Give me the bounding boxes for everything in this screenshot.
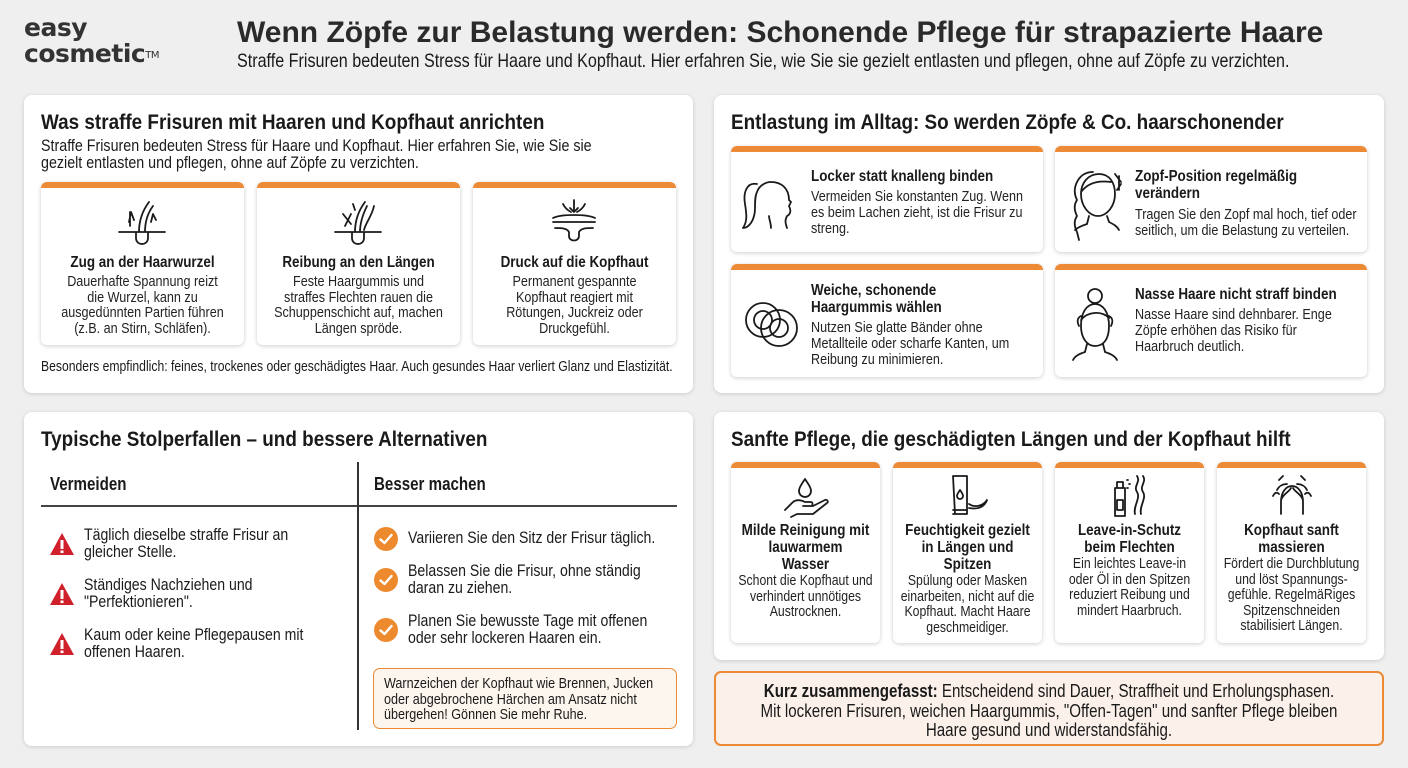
card: Reibung: Reibung an den Längen xyxy=(282,254,435,271)
card: Feuchtigkeit: Spülung oder Masken xyxy=(908,573,1027,589)
card: Locker: Vermeiden Sie konstanten Zug. Wenn xyxy=(811,188,1023,205)
title: Wenn Zöpfe zur Belastung werden: Schonende Pflege für strapazierte Haare xyxy=(237,16,1323,49)
card: Reinigung: lauwarmem xyxy=(769,539,842,556)
card: Leave-in: Ein leichtes Leave-in xyxy=(1073,556,1186,572)
icon: scrunchies xyxy=(745,302,798,347)
card: Feuchtigkeit: einarbeiten, nicht auf die xyxy=(901,588,1034,604)
logo: cosmeticTM xyxy=(24,39,159,68)
card: Zopf-Position: verändern xyxy=(1135,185,1200,202)
item: better 3: Planen Sie bewusste Tage mit offenen xyxy=(408,611,647,630)
panel: Stolperfallen xyxy=(24,412,693,746)
callout: warning signs: Warnzeichen der Kopfhaut wie Brennen, Jucken xyxy=(384,675,653,692)
card: Reibung: Feste Haargummis und xyxy=(293,273,424,290)
icon: friction hair xyxy=(334,201,382,245)
card: Leave-in: mindert Haarbruch. xyxy=(1077,602,1182,618)
icon: tube xyxy=(952,475,988,515)
card: Feuchtigkeit: in Längen und xyxy=(922,539,1013,556)
card: Druck xyxy=(473,182,676,345)
card: Druck: Kopfhaut reagiert mit xyxy=(516,288,633,306)
card: Zopf-Position: seitlich, um die Belastung zu verteilen. xyxy=(1135,222,1349,239)
card: Kopfhaut massieren: gefühle. RegelmäRiges xyxy=(1228,587,1355,603)
card: Zug: (z.B. an Stirn, Schläfen). xyxy=(74,320,211,336)
card: Druck: Permanent gespannte xyxy=(512,273,636,290)
item: better 3: oder sehr lockeren Haaren ein. xyxy=(408,628,602,647)
icon: massage head xyxy=(1272,475,1312,515)
item: better 2: Belassen Sie die Frisur, ohne ständig xyxy=(408,561,641,580)
card: Kopfhaut massieren: stabilisiert Längen. xyxy=(1240,618,1343,634)
column header: Besser machen: Besser machen xyxy=(374,474,486,494)
card: Reinigung: verhindert unnötiges xyxy=(750,588,861,604)
card: Nasse Haare xyxy=(1055,264,1367,377)
card: Zopf-Position: Tragen Sie den Zopf mal hoch, tief oder xyxy=(1135,206,1357,223)
card: Locker xyxy=(731,146,1043,252)
item: better 1: Variieren Sie den Sitz der Frisur täglich. xyxy=(408,528,655,547)
card: Druck: Rötungen, Juckreiz oder xyxy=(506,304,643,321)
card: Haargummis xyxy=(731,264,1043,377)
callout: summary: Haare gesund und widerstandsfähig. xyxy=(926,720,1172,740)
card: Reinigung: Schont die Kopfhaut und xyxy=(738,573,873,589)
item: avoid 2: "Perfektionieren". xyxy=(84,592,193,611)
card: Druck: Druck auf die Kopfhaut xyxy=(501,254,648,271)
item: avoid 3: offenen Haaren. xyxy=(84,642,185,661)
card: Feuchtigkeit: Feuchtigkeit gezielt xyxy=(905,522,1030,539)
card: Leave-in: oder Öl in den Spitzen xyxy=(1069,572,1190,588)
card: Nasse Haare: Zöpfe erhöhen das Risiko für xyxy=(1135,322,1297,339)
callout: summary: Mit lockeren Frisuren, weichen Haargummis, "Offen-Tagen" und sanfter Pflege bleiben xyxy=(761,700,1337,720)
item: better 2 xyxy=(374,561,641,597)
card: Zug xyxy=(41,182,244,345)
callout: warning signs: übergehen! Gönnen Sie mehr Ruhe. xyxy=(384,706,587,723)
item: avoid 2: Ständiges Nachziehen und xyxy=(84,575,252,594)
item: avoid 2 xyxy=(50,575,252,611)
card: Haargummis: Reibung zu minimieren. xyxy=(811,351,943,368)
item: avoid 1: Täglich dieselbe straffe Frisur an xyxy=(84,525,288,544)
card: Locker: Locker statt knalleng binden xyxy=(811,168,993,185)
panel: Was straffe Frisuren xyxy=(24,95,693,393)
card: Feuchtigkeit: geschmeidiger. xyxy=(926,620,1009,636)
icon: water hand xyxy=(784,478,829,518)
card: Druck: Druckgefühl. xyxy=(539,320,610,336)
icon: scalp pressure xyxy=(552,199,596,242)
card: Zug: Zug an der Haarwurzel xyxy=(70,254,215,271)
item: better 1 xyxy=(374,527,655,551)
list: better xyxy=(374,527,655,647)
icon: spray xyxy=(1114,475,1146,517)
icon: ponytail head xyxy=(742,181,792,229)
item: better 2: daran zu ziehen. xyxy=(408,578,512,597)
card: Haargummis: Haargummis wählen xyxy=(811,299,942,316)
card: Nasse Haare: Haarbruch deutlich. xyxy=(1135,338,1244,355)
card: Kopfhaut massieren: massieren xyxy=(1258,539,1325,556)
card: Feuchtigkeit xyxy=(893,462,1042,643)
heading: Was straffe Frisuren mit Haaren und Kopfhaut anrichten xyxy=(41,111,544,134)
card: Zug: ausgedünnten Partien führen xyxy=(61,304,224,321)
card: Zug: die Wurzel, kann zu xyxy=(87,288,198,306)
card: Locker: streng. xyxy=(811,220,850,237)
callout: summary xyxy=(714,671,1384,746)
card: Reibung: Schuppenschicht auf, machen xyxy=(274,304,443,321)
logo xyxy=(24,13,159,68)
card: Reibung: Längen spröde. xyxy=(315,320,402,336)
card: Reinigung: Wasser xyxy=(782,556,829,573)
icon: braid head xyxy=(1074,171,1122,241)
card: Kopfhaut massieren: Kopfhaut sanft xyxy=(1244,522,1339,539)
card: Kopfhaut massieren: Fördert die Durchblutung xyxy=(1224,556,1359,572)
icon: hair root pull xyxy=(118,201,166,245)
card: Reinigung xyxy=(731,462,880,643)
panel: Sanfte Pflege xyxy=(714,412,1384,660)
callout: warning signs: oder abgebrochene Härchen am Ansatz nicht xyxy=(384,690,637,708)
item: avoid 3: Kaum oder keine Pflegepausen mit xyxy=(84,625,303,644)
card: Leave-in: Leave-in-Schutz xyxy=(1078,522,1181,539)
intro text: gezielt entlasten und pflegen, ohne auf Zöpfe zu verzichten. xyxy=(41,153,419,172)
logo: easy xyxy=(24,13,87,42)
card: Leave-in: reduziert Reibung und xyxy=(1069,587,1190,603)
list: avoid xyxy=(50,525,304,661)
item: better 3 xyxy=(374,611,647,647)
item: avoid 3 xyxy=(50,625,304,661)
footer note: Besonders empfindlich: feines, trockenes oder geschädigtes Haar. Auch gesundes Haar verliert Glanz und Elastizität. xyxy=(41,359,673,375)
card: Reinigung: Austrocknen. xyxy=(770,604,841,620)
callout: summary: Kurz zusammengefasst: Entscheidend sind Dauer, Straffheit und Erholungsphasen. xyxy=(764,681,1334,701)
card: Haargummis: Metallteile oder scharfe Kanten, um xyxy=(811,335,1009,352)
heading: Sanfte Pflege, die geschädigten Längen und der Kopfhaut hilft xyxy=(731,428,1291,451)
heading: Entlastung im Alltag: So werden Zöpfe & Co. haarschonender xyxy=(731,111,1284,134)
card: Kopfhaut massieren xyxy=(1217,462,1366,643)
card: Reinigung: Milde Reinigung mit xyxy=(742,522,869,539)
item: avoid 1 xyxy=(50,525,288,561)
intro text xyxy=(41,136,592,172)
callout: warning signs xyxy=(373,668,677,729)
card: Locker: es beim Lachen zieht, ist die Frisur zu xyxy=(811,204,1022,221)
card: Zug: Dauerhafte Spannung reizt xyxy=(67,273,218,290)
icon: bun head xyxy=(1072,288,1118,361)
column header: Vermeiden: Vermeiden xyxy=(50,474,126,494)
heading: Typische Stolperfallen – und bessere Alternativen xyxy=(41,428,487,451)
card: Reibung: straffes Flechten rauen die xyxy=(284,288,433,306)
panel: Entlastung im Alltag xyxy=(714,95,1384,393)
card: Feuchtigkeit: Spitzen xyxy=(944,556,991,573)
card: Haargummis: Weiche, schonende xyxy=(811,282,936,299)
card: Zopf-Position xyxy=(1055,146,1367,252)
card: Feuchtigkeit: Kopfhaut. Macht Haare xyxy=(904,604,1031,620)
card: Nasse Haare: Nasse Haare nicht straff binden xyxy=(1135,286,1337,303)
card: Kopfhaut massieren: und löst Spannungs- xyxy=(1235,572,1348,588)
item: avoid 1: gleicher Stelle. xyxy=(84,542,176,561)
intro text: Straffe Frisuren bedeuten Stress für Haare und Kopfhaut. Hier erfahren Sie, wie Sie sie xyxy=(41,136,592,155)
card: Leave-in: beim Flechten xyxy=(1084,539,1175,556)
card: Nasse Haare: Nasse Haare sind dehnbarer. Enge xyxy=(1135,306,1332,323)
card: Reibung xyxy=(257,182,460,345)
card: Leave-in xyxy=(1055,462,1204,643)
card: Zopf-Position: Zopf-Position regelmäßig xyxy=(1135,168,1297,185)
card: Kopfhaut massieren: Spitzenschneiden xyxy=(1243,602,1340,618)
card: Haargummis: Nutzen Sie glatte Bänder ohne xyxy=(811,319,983,336)
subtitle: Straffe Frisuren bedeuten Stress für Haare und Kopfhaut. Hier erfahren Sie, wie Sie sie gezielt entlasten und pflegen, ohne auf Zöpfe zu verzichten. xyxy=(237,51,1289,72)
